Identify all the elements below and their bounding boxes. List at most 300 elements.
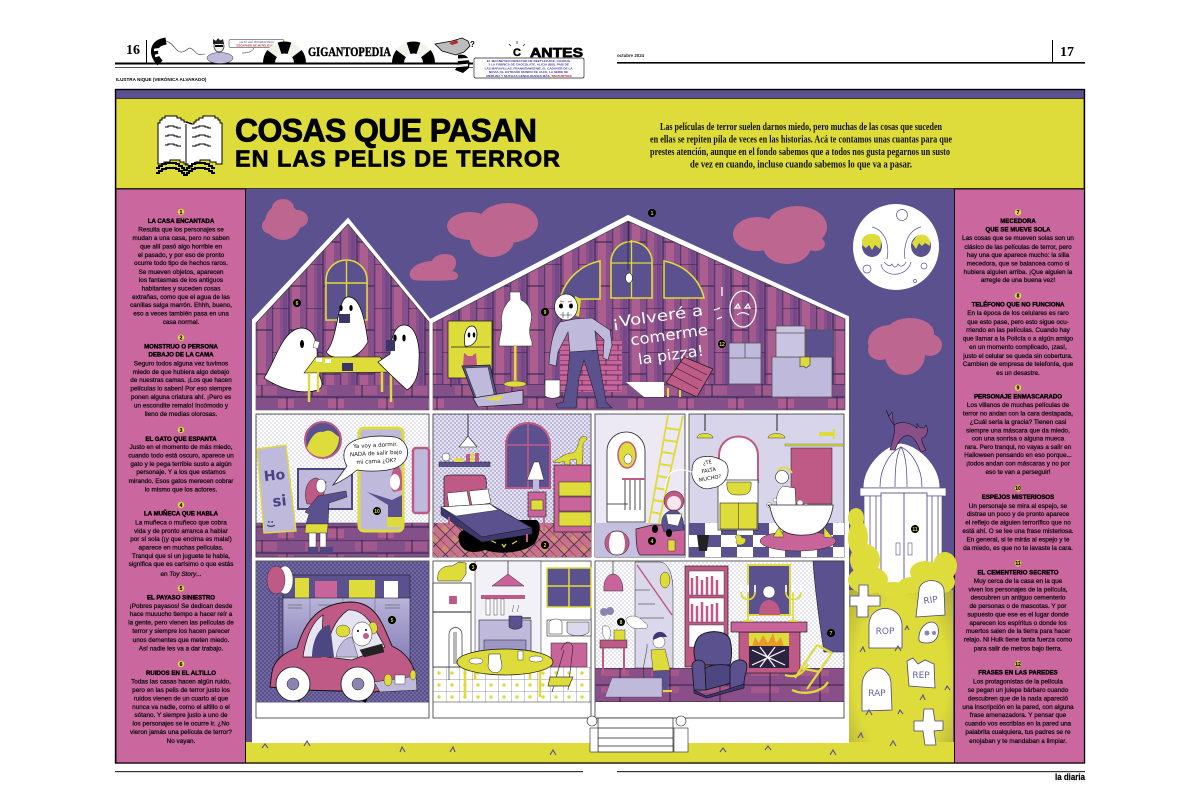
item 9 personaje enmascarado: rara. Pero tranqui, no vayas a salir en [965,444,1072,451]
panel: graveyard tombstones [262,581,950,755]
cloud 2 [447,203,538,257]
kitchen window [547,568,591,607]
ROP tombstone: ROP [876,627,895,637]
item 4 la muñeca que habla: vida y de pronto arranca a hablar [134,528,229,535]
item 4 la muñeca que habla: La muñeca o muñeco que cobra [135,520,227,526]
leaning mirror with HOLI: si [272,491,287,511]
speech bubble doll: ¿TE [702,459,712,467]
cloud 5 [868,318,942,375]
item 12 frases en las paredes [962,661,1074,745]
callout: description box: MERLINA Y MUCHAS GENIALIDADES MÁS, TIM BURTON! [486,74,572,78]
numbered markers on illustration: 9 [544,310,547,316]
numbered markers on illustration: 6 [296,301,299,307]
numbered markers on illustration [293,209,919,637]
item 5 el payaso siniestro: EL PAYASO SINIESTRO [147,594,215,602]
numbered markers on illustration: 8 [620,620,623,626]
panel: kitchen [433,561,591,718]
item 2 monstruo debajo de la cama: DEBAJO DE LA CAMA [148,352,214,358]
item 7 mecedora: mecedora, que se balancea como si [967,260,1069,268]
intro text: de vez en cuando, incluso cuando sabemos lo que va a pasar. [690,160,912,170]
item 4 la muñeca que habla: aparece en muchas películas. [139,545,224,552]
graffiti message: comerme [629,321,709,349]
item 9 personaje enmascarado: eso te van a perseguir! [985,469,1051,476]
item 2 monstruo debajo de la cama: miedo de que hubiera algo debajo [133,369,230,376]
callout: description box: Y LA FÁBRICA DE CHOCOLATE, ALICIA (BIS), PAÍS DE [488,62,569,67]
item 1 la casa encantada: canillas salga marrón. Ehhh, bueno, [130,302,232,309]
numbered markers on illustration: 1 [651,211,654,217]
header: left page masthead [115,38,584,82]
graffiti message: ¡Volveré a [611,301,704,332]
wall shelf with books [439,453,490,466]
open pizza box [462,365,523,407]
numbered markers on illustration: 12 [719,342,725,348]
garage shelf and lockers [283,575,410,667]
car [270,602,417,702]
item 4 la muñeca que habla: 4 [180,503,183,509]
item 2 monstruo debajo de la cama [130,334,232,418]
item 6 ruidos en el altillo: sótano. Y siempre justo a uno de [134,712,228,719]
item 10 espejos misteriosos: está ahí. O se lee una frase misteriosa. [962,528,1074,535]
item 11 el cementerio secreto: de personas o de mascotas. Y por [969,603,1067,610]
attic windows [560,240,704,299]
heading: EN LAS PELIS DE TERROR [235,146,560,172]
item 11 el cementerio secreto: aparecen los espíritus o donde los [969,620,1067,627]
item 5 el payaso siniestro [128,585,234,652]
ghost right [378,325,419,390]
item 7 mecedora [962,209,1074,284]
item 6 ruidos en el altillo: Todas las casas hacen algún ruido, [131,678,231,685]
panel: bedroom with monster [433,414,591,557]
item 11 el cementerio secreto: viven los personajes de la película, [968,586,1068,593]
ceiling lamps [697,414,785,438]
leaning mirror with HOLI: Ho [263,467,286,485]
item 7 mecedora: 7 [1017,210,1020,216]
item 1 la casa encantada: habitantes y suceden cosas [142,285,220,292]
item 7 mecedora: hubiera alguien arriba. ¡Que alguien la [964,269,1073,276]
fireplace [731,622,807,673]
masthead word: Cantantes: ANTES [530,45,583,60]
item 12 frases en las paredes: cuando vos escribías en la pared una [965,720,1072,728]
round yellow mirror [305,422,341,458]
speech bubble doll: FALTA [701,467,717,475]
back wall panel [475,561,541,667]
item 1 la casa encantada: que allí pasó algo horrible en [140,244,222,250]
item 8 teléfono: TELÉFONO QUE NO FUNCIONA [972,301,1065,309]
chairs [449,628,573,692]
item 1 la casa encantada: LA CASA ENCANTADA [148,218,215,225]
doll [652,491,684,537]
panel: mausoleum with cat [848,410,957,598]
floor rug [605,678,662,697]
curtain [813,561,844,652]
item 1 la casa encantada: ocurre todo tipo de hechos raros. [134,260,228,267]
item 4 la muñeca que habla: por sí sola (¡y que encima es mala!) [130,536,232,543]
item 10 espejos misteriosos: Un personaje se mira al espejo, se [969,503,1068,510]
item 11 el cementerio secreto [964,560,1073,652]
dining table [457,649,553,697]
item 9 personaje enmascarado: ¿Cuál sería la gracia? Tienen casi [970,419,1066,426]
item 8 teléfono: En la época de los celulares es raro [967,310,1069,317]
intro text: prestes atención, aunque en el fondo sabemos que a todos nos gusta pegarnos un susto [650,147,950,158]
graffiti skull [714,287,756,327]
item 1 la casa encantada: casa normal. [163,319,200,326]
speech bubble doll [665,456,728,490]
ghost center [326,297,368,358]
item 8 teléfono: justo el celular se queda sin cobertura. [962,353,1073,360]
callout: small speech box [229,40,284,53]
sink and counter [547,619,591,667]
RIP tombstone: RIP [923,595,939,607]
callout: description box: NOVIA, EL EXTRAÑO MUNDO DE JACK, LA SERIE DE [489,69,568,74]
item 5 el payaso siniestro: 5 [180,586,183,592]
item 3 el gato que espanta: cuando todo está oscuro, aparece un [128,452,234,459]
item 4 la muñeca que habla [129,502,233,578]
item 1 la casa encantada: eso a veces también pasa en una [133,310,229,318]
item 5 el payaso siniestro: ¡Pobres payasos! Se dedican desde [130,603,233,610]
panel: garage with clown car [256,561,429,718]
arched cat [886,410,927,452]
item 12 frases en las paredes: FRASES EN LAS PAREDES [978,670,1058,677]
page number 17: 17 [1060,45,1074,60]
item 2 monstruo debajo de la cama: de nuestras camas. ¡Los que hacen [130,377,232,384]
item 7 mecedora: MECEDORA [1000,218,1036,225]
callout: small speech box: ¡ALTO AHÍ, BIOGRAFIADO [239,40,274,44]
item 10 espejos misteriosos: ESPEJOS MISTERIOSOS [982,494,1054,501]
hood lamp [492,561,524,586]
item 10 espejos misteriosos: distrae un poco y de pronto aparece [967,511,1070,518]
item 1 la casa encantada: Resulta que los personajes se [138,227,224,234]
callout: description box: EL MAGNÉTICO DIRECTOR DE BEETLEJUICE, CHARLIE [487,58,570,63]
panel: living room [595,561,844,718]
item 11 el cementerio secreto: supuesto que ese es el lugar donde [967,611,1069,618]
icon: striped arc left [269,48,300,63]
item 3 el gato que espanta: lo mismo que los actores. [145,486,217,494]
arched bath mirror [719,436,758,482]
item 2 monstruo debajo de la cama: un escondite remalo! Incómodo y [134,402,229,409]
item 6 ruidos en el altillo: 6 [180,662,183,668]
item 12 frases en las paredes: se pegan un julepe bárbaro cuando [968,687,1069,694]
date: octubre 2024 [617,53,645,58]
arch opening [607,432,645,522]
heading [235,112,560,172]
header: right page masthead [617,40,1085,64]
item 6 ruidos en el altillo: ruidos vienen de un cuarto al que [134,696,229,702]
portrait painting [748,565,790,615]
leaning mirror with HOLI: :) [265,520,275,528]
item 3 el gato que espanta: EL GATO QUE ESPANTA [145,436,217,443]
icon: moon with face [853,204,939,290]
bedroom window [506,423,550,488]
item 6 ruidos en el altillo: pero en las pelis de terror justo los [132,687,230,694]
item 12 frases en las paredes: frase amenazadora. Y pensar que [970,712,1067,719]
stair railing [607,479,645,510]
chest [636,525,685,555]
skull [919,622,938,643]
hanging bulb [626,222,632,283]
item 8 teléfono: que esto pase, pero esto sigue ocu- [967,319,1069,326]
dresser with dinosaur [553,436,591,532]
item 3 el gato que espanta: gato y le pega terrible susto a algún [130,461,232,468]
item 9 personaje enmascarado: 9 [1017,386,1020,392]
item 8 teléfono: rriendo en las películas. Cuando hay [966,327,1071,334]
item 1 la casa encantada: mudan a una casa, pero no saben [132,235,230,242]
wall painting [298,469,352,509]
panel: left attic, ghosts playing cards [256,224,429,410]
ladder [649,415,683,526]
ceiling lamp [459,414,477,447]
cross tombstone top [850,585,880,617]
item 7 mecedora: hay una que aparece mucho: la silla [967,252,1070,259]
item 3 el gato que espanta: Justo en el momento de más miedo, [129,444,233,451]
panel: right text column [954,189,1084,763]
item 11 el cementerio secreto: Muy cerca de la casa en la que [974,578,1063,585]
item 12 frases en las paredes: palabrita cualquiera, tus padres se re [965,729,1071,736]
numbered markers on illustration: 5 [391,618,394,624]
numbered markers on illustration: 4 [651,539,654,545]
item 10 espejos misteriosos [962,485,1074,552]
window [326,260,367,320]
item 2 monstruo debajo de la cama: 2 [180,336,183,342]
trapdoor [626,357,713,397]
main frame [116,90,1084,763]
item 11 el cementerio secreto: descubren un antiguo cementerio [971,595,1066,602]
oval portrait [618,442,636,468]
REP tombstone: REP [912,671,930,681]
ROP tombstone [869,608,902,648]
masked villain [545,294,622,408]
fridge with cat [433,562,471,667]
item 9 personaje enmascarado: Halloween pensando en eso porque... [964,452,1072,459]
item 9 personaje enmascarado: Los villanos de muchas películas de [967,402,1070,409]
item 12 frases en las paredes: 12 [1015,662,1021,668]
masthead word: Cantantes [509,41,583,60]
item 9 personaje enmascarado: PERSONAJE ENMASCARADO [974,394,1062,401]
graffiti message: la pizza! [637,341,705,368]
rocking chair [785,645,832,693]
side table, vase and phone [600,607,627,674]
panel: left text column [116,189,246,763]
item 1 la casa encantada: los fantasmas de los antiguos [139,277,223,284]
numbered markers on illustration: 10 [374,509,380,515]
bathtub [768,505,833,538]
ghost left [264,328,325,392]
item 3 el gato que espanta: personaje. Y a los que estamos [136,469,226,476]
item 7 mecedora: Las cosas que se mueven solas son un [962,235,1074,242]
item 10 espejos misteriosos: el reflejo de alguien terrorífico que no [965,520,1071,526]
yellow bushes [848,508,957,598]
pink framed mirror [413,448,429,513]
item 8 teléfono: en un momento complicado, ¡zas!, [969,344,1067,351]
table lamp and night stand [527,462,546,531]
pendant lamp [604,561,623,591]
icon: snake head [435,38,475,73]
item 4 la muñeca que habla: Tranqui que si un juguete te habla, [132,553,230,560]
tall door mirror [359,428,403,531]
RAP tombstone [862,668,892,711]
grass tufts [262,626,950,755]
shower rod and curtain [785,429,844,504]
icon: striped worm tail [154,41,205,63]
bookcase [685,566,728,667]
item 1 la casa encantada: extrañas, como que el agua de las [132,294,230,301]
item 4 la muñeca que habla: en Toy Story... [161,571,201,578]
panel: bathroom [665,414,844,557]
balloons [267,566,293,670]
item 4 la muñeca que habla: LA MUÑECA QUE HABLA [144,510,219,518]
beach ball [605,531,629,555]
item 9 personaje enmascarado: siempre una máscara que da miedo, [966,428,1070,434]
panel: main attic [433,221,845,410]
item 1 la casa encantada: Se mueven objetos, aparecen [139,269,224,276]
item 5 el payaso siniestro: la gente, pero vienen las películas de [128,620,234,627]
item 9 personaje enmascarado [963,384,1073,476]
cross tombstone bottom [914,709,943,745]
item 10 espejos misteriosos: 10 [1015,486,1021,492]
intro text [650,122,952,170]
item 3 el gato que espanta: 3 [180,428,183,434]
dress mannequin [499,292,532,387]
speech bubble: mi cama ¿OK? [356,458,397,466]
illustrator credit: ILUSTRA NIQUE (VERÓNICA ALVARADO) [116,75,207,82]
item 6 ruidos en el altillo: vieron jamás una película de terror? [130,729,232,736]
woman in bathtub [766,467,808,508]
girl [305,478,347,553]
item 4 la muñeca que habla: significa que es carísimo o que estás [129,561,233,568]
item 5 el payaso siniestro: Así nadie les va a dar trabajo. [139,646,223,652]
bath rug [760,531,836,551]
yellow graveyard ground [246,590,954,763]
heading: COSAS QUE PASAN [235,112,537,148]
callout: description box [474,58,584,78]
item 12 frases en las paredes: una inscripción en la pared, con alguna [962,704,1074,711]
REP tombstone [907,658,935,688]
item 3 el gato que espanta: mirando. Esos gatos merecen cobrar [129,478,234,485]
item 5 el payaso siniestro: unos dementes que meten miedo. [133,637,230,644]
leaning mirror with HOLI [257,445,296,533]
panel: night sky scene [246,189,954,763]
graffiti message [611,301,712,371]
mausoleum [860,443,946,588]
panel: title band [116,98,1084,188]
yellow shelf with skull and cat [448,321,492,387]
rubber duck [735,535,746,545]
sink and cabinet [718,480,758,530]
logo la diaria: la diaria [1055,772,1086,782]
callout: description box: LAS MARAVILLAS, FRANKENWEENIE, EL CADÁVER DE LA [485,65,573,70]
panel: room mirror hall [256,414,429,557]
item 12 frases en las paredes: enojaban y te mandaban a limpiar. [969,738,1067,745]
item 8 teléfono: es un desastre. [996,370,1040,377]
candelabra [741,585,801,621]
item 11 el cementerio secreto: muertos salen de la tierra para hacer [966,628,1071,635]
panel: hall with ladder and doll [595,414,685,557]
bed [441,475,532,542]
item 7 mecedora: QUE SE MUEVE SOLA [985,226,1051,234]
speech bubble: NADA de salir bajo [350,450,403,458]
item 6 ruidos en el altillo [130,661,232,745]
numbered markers on illustration: 11 [912,527,918,533]
item 5 el payaso siniestro: terror y siempre los hacen parecer [132,628,231,635]
stove and pot [479,605,531,667]
item 11 el cementerio secreto: EL CEMENTERIO SECRETO [977,570,1059,576]
item 12 frases en las paredes: Los protagonistas de la película [973,678,1063,685]
card table [304,357,392,402]
item 9 personaje enmascarado: con una sonrisa o alguna mueca [972,436,1065,442]
icon: open pixel book [156,116,222,175]
cloud 1 [262,199,308,240]
item 5 el payaso siniestro: hace muuucho tiempo a hacer reír a [130,611,233,618]
intro text: en ellas se repiten pila de veces en las historias. Acá te contamos unas cuantas para que [650,134,952,146]
item 3 el gato que espanta [128,427,234,494]
house body [253,216,848,742]
item 8 teléfono: Cambien de empresa de telefonía, que [963,361,1074,368]
item 2 monstruo debajo de la cama: lleno de medias olorosas. [145,411,217,418]
item 7 mecedora: arregle de una buena vez! [981,277,1055,284]
icon: snake head: ? [470,40,475,49]
numbered markers on illustration: 2 [544,543,547,549]
cloud 4 [733,206,827,264]
numbered markers on illustration: 3 [472,565,475,571]
RAP tombstone: RAP [868,689,886,699]
item 9 personaje enmascarado: ¡todos andan con máscaras y no por [966,460,1071,468]
item 7 mecedora: clásico de las películas de terror, pero [964,244,1072,251]
item 11 el cementerio secreto: 11 [1015,561,1021,567]
waste bin [697,535,709,551]
item 1 la casa encantada [130,209,232,326]
speech bubble: Ya voy a dormir. [352,442,398,450]
item 2 monstruo debajo de la cama: MONSTRUO O PERSONA [144,344,218,350]
armchair [692,632,747,698]
stairway wall [626,562,673,668]
item 12 frases en las paredes: descubren que de la nada apareció [968,696,1069,702]
storage boxes [729,326,833,397]
knife rack [481,595,525,615]
frame outline [116,90,1084,763]
speech bubble [333,436,408,485]
RIP tombstone [916,581,945,617]
item 6 ruidos en el altillo: los personajes se le ocurre ir. ¿No [133,720,230,728]
masthead title: GIGANTOPEDIA [308,44,391,59]
front steps [587,716,688,752]
boy on phone [643,632,672,692]
item 6 ruidos en el altillo: nunca va nadie, como el altillo o el [132,704,230,711]
item 8 teléfono: que llamar a la Policía o a algún amigo [963,336,1074,342]
icon: striped arc right [398,48,429,63]
item 9 personaje enmascarado: terror no andan con la cara destapada, [963,410,1073,418]
item 2 monstruo debajo de la cama: Seguro todos alguna vez tuvimos [134,360,228,368]
item 6 ruidos en el altillo: No vayan. [167,738,196,745]
item 11 el cementerio secreto: relajo. Ni Hulk tiene tanta fuerza como [964,636,1073,644]
speech bubble doll: MUCHO? [699,474,722,484]
item 2 monstruo debajo de la cama: películas lo saben! Por eso siempre [130,386,232,393]
item 1 la casa encantada: 1 [180,210,183,216]
item 1 la casa encantada: el pasado, y por eso de pronto [138,252,225,259]
item 8 teléfono [962,292,1074,377]
numbered markers on illustration: 7 [830,631,833,637]
monster under bed [458,520,540,553]
page number 16: 16 [126,43,140,58]
item 2 monstruo debajo de la cama: ponen alguna criatura ahí. ¡Pero es [131,394,231,401]
icon: caricature on rabbit [207,38,233,64]
intro text: Las películas de terror suelen darnos miedo, pero muchas de las cosas que suceden [660,122,942,133]
item 8 teléfono: 8 [1017,294,1020,300]
item 11 el cementerio secreto: para salir de metros bajo tierra. [974,645,1062,652]
masthead word: Cantantes: C [513,47,521,59]
item 6 ruidos en el altillo: RUIDOS EN EL ALTILLO [146,670,216,677]
cloud 3 [410,254,458,281]
item 10 espejos misteriosos: En general, si te mirás al espejo y te [966,536,1070,544]
callout: small speech box: ESCAPADO DE MI PELÍCULA! [237,42,277,47]
